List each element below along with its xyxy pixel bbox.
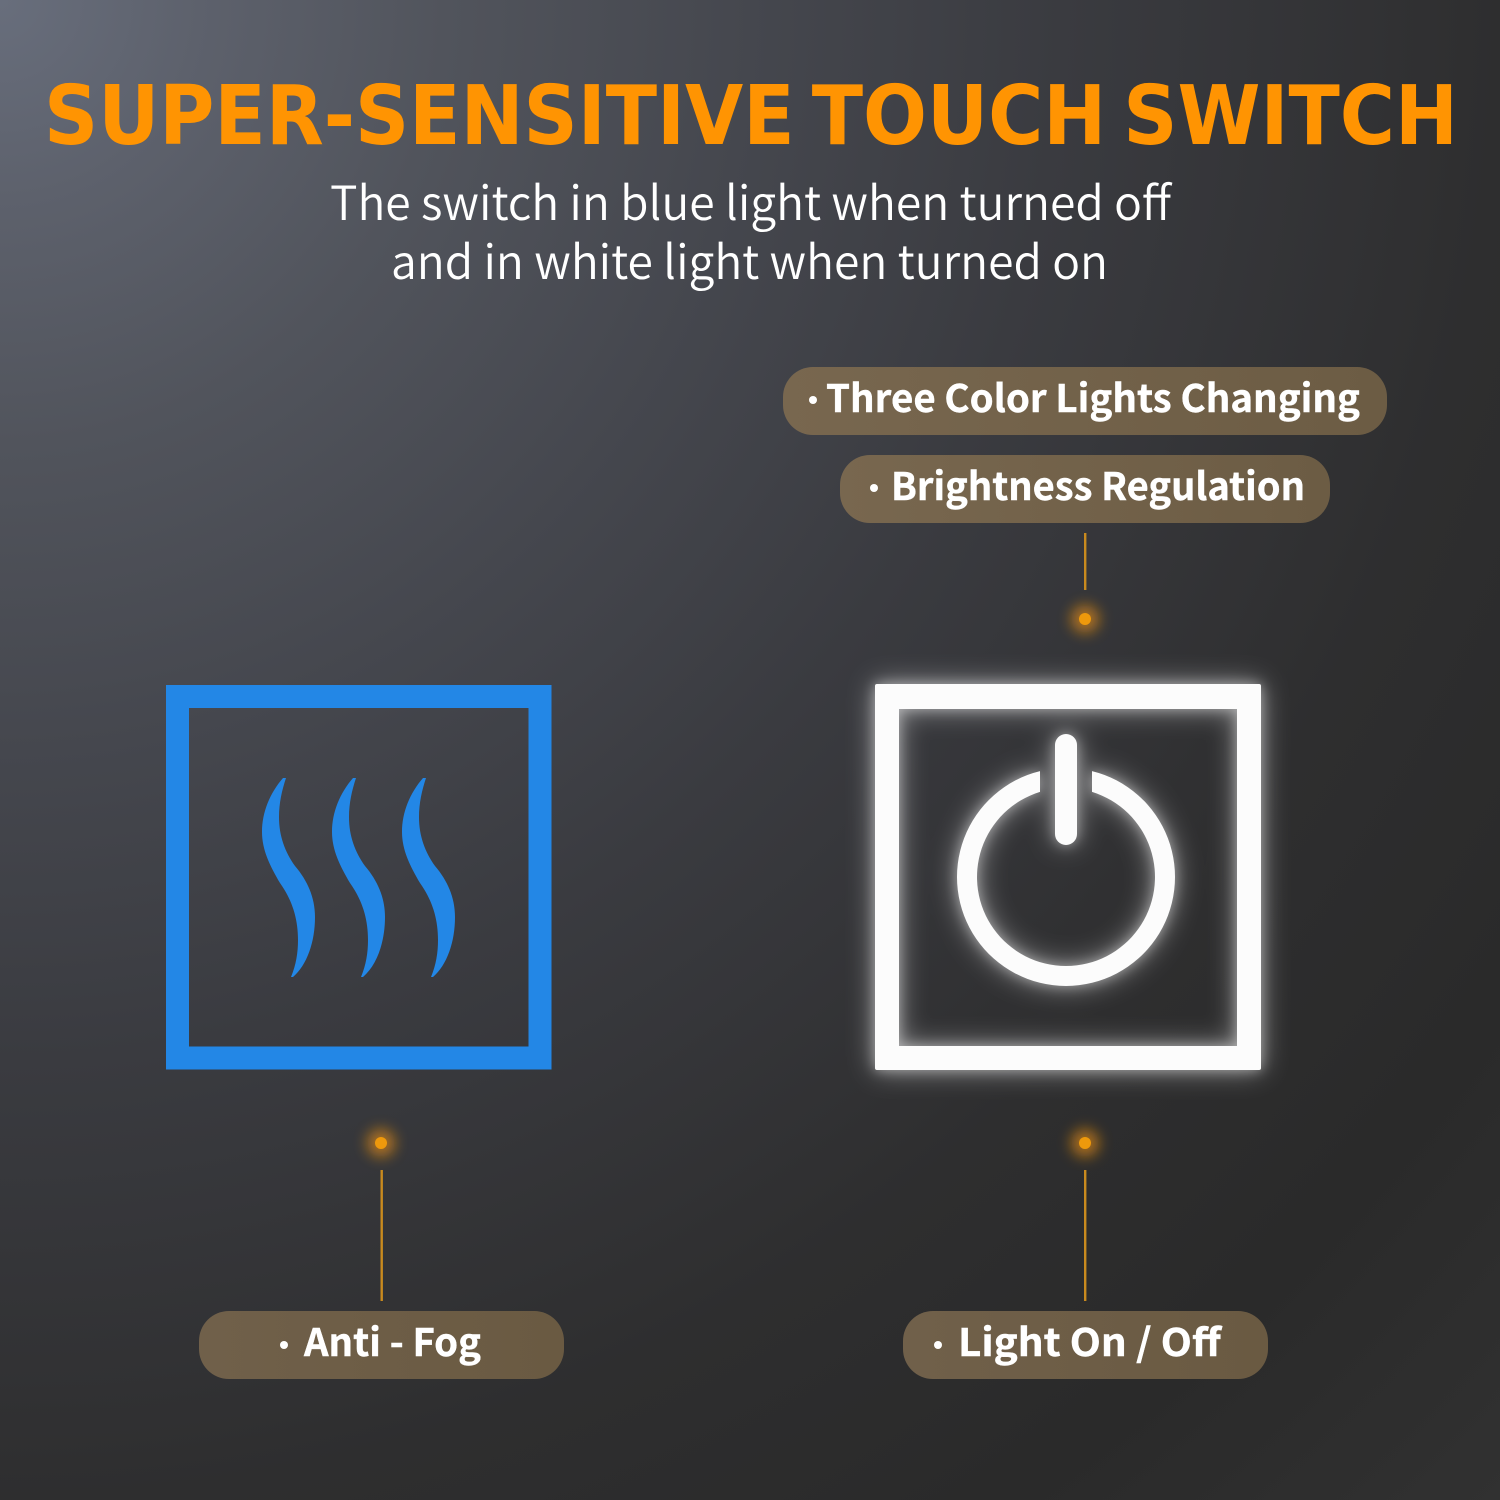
connector: top right (1071, 533, 1099, 633)
subtitle: The switch in blue light when turned off (330, 165, 1173, 234)
subtitle: and in white light when turned on (391, 224, 1108, 293)
callout: brightness regulation (840, 455, 1330, 523)
subtitle (330, 165, 1173, 293)
callout: anti-fog: Anti - Fog (303, 1312, 481, 1367)
callout: anti-fog (199, 1311, 564, 1379)
connector: anti-fog (367, 1129, 395, 1301)
callout: light on/off (903, 1311, 1268, 1379)
icon: power switch (white glowing) (875, 684, 1261, 1070)
connector: light on/off (1071, 1129, 1099, 1301)
callout: brightness regulation: Brightness Regulation (891, 456, 1305, 511)
icon: anti-fog switch (blue) (178, 696, 540, 1058)
callout: three color lights: Three Color Lights Changing (826, 368, 1360, 423)
callout: light on/off: Light On / Off (958, 1312, 1223, 1367)
